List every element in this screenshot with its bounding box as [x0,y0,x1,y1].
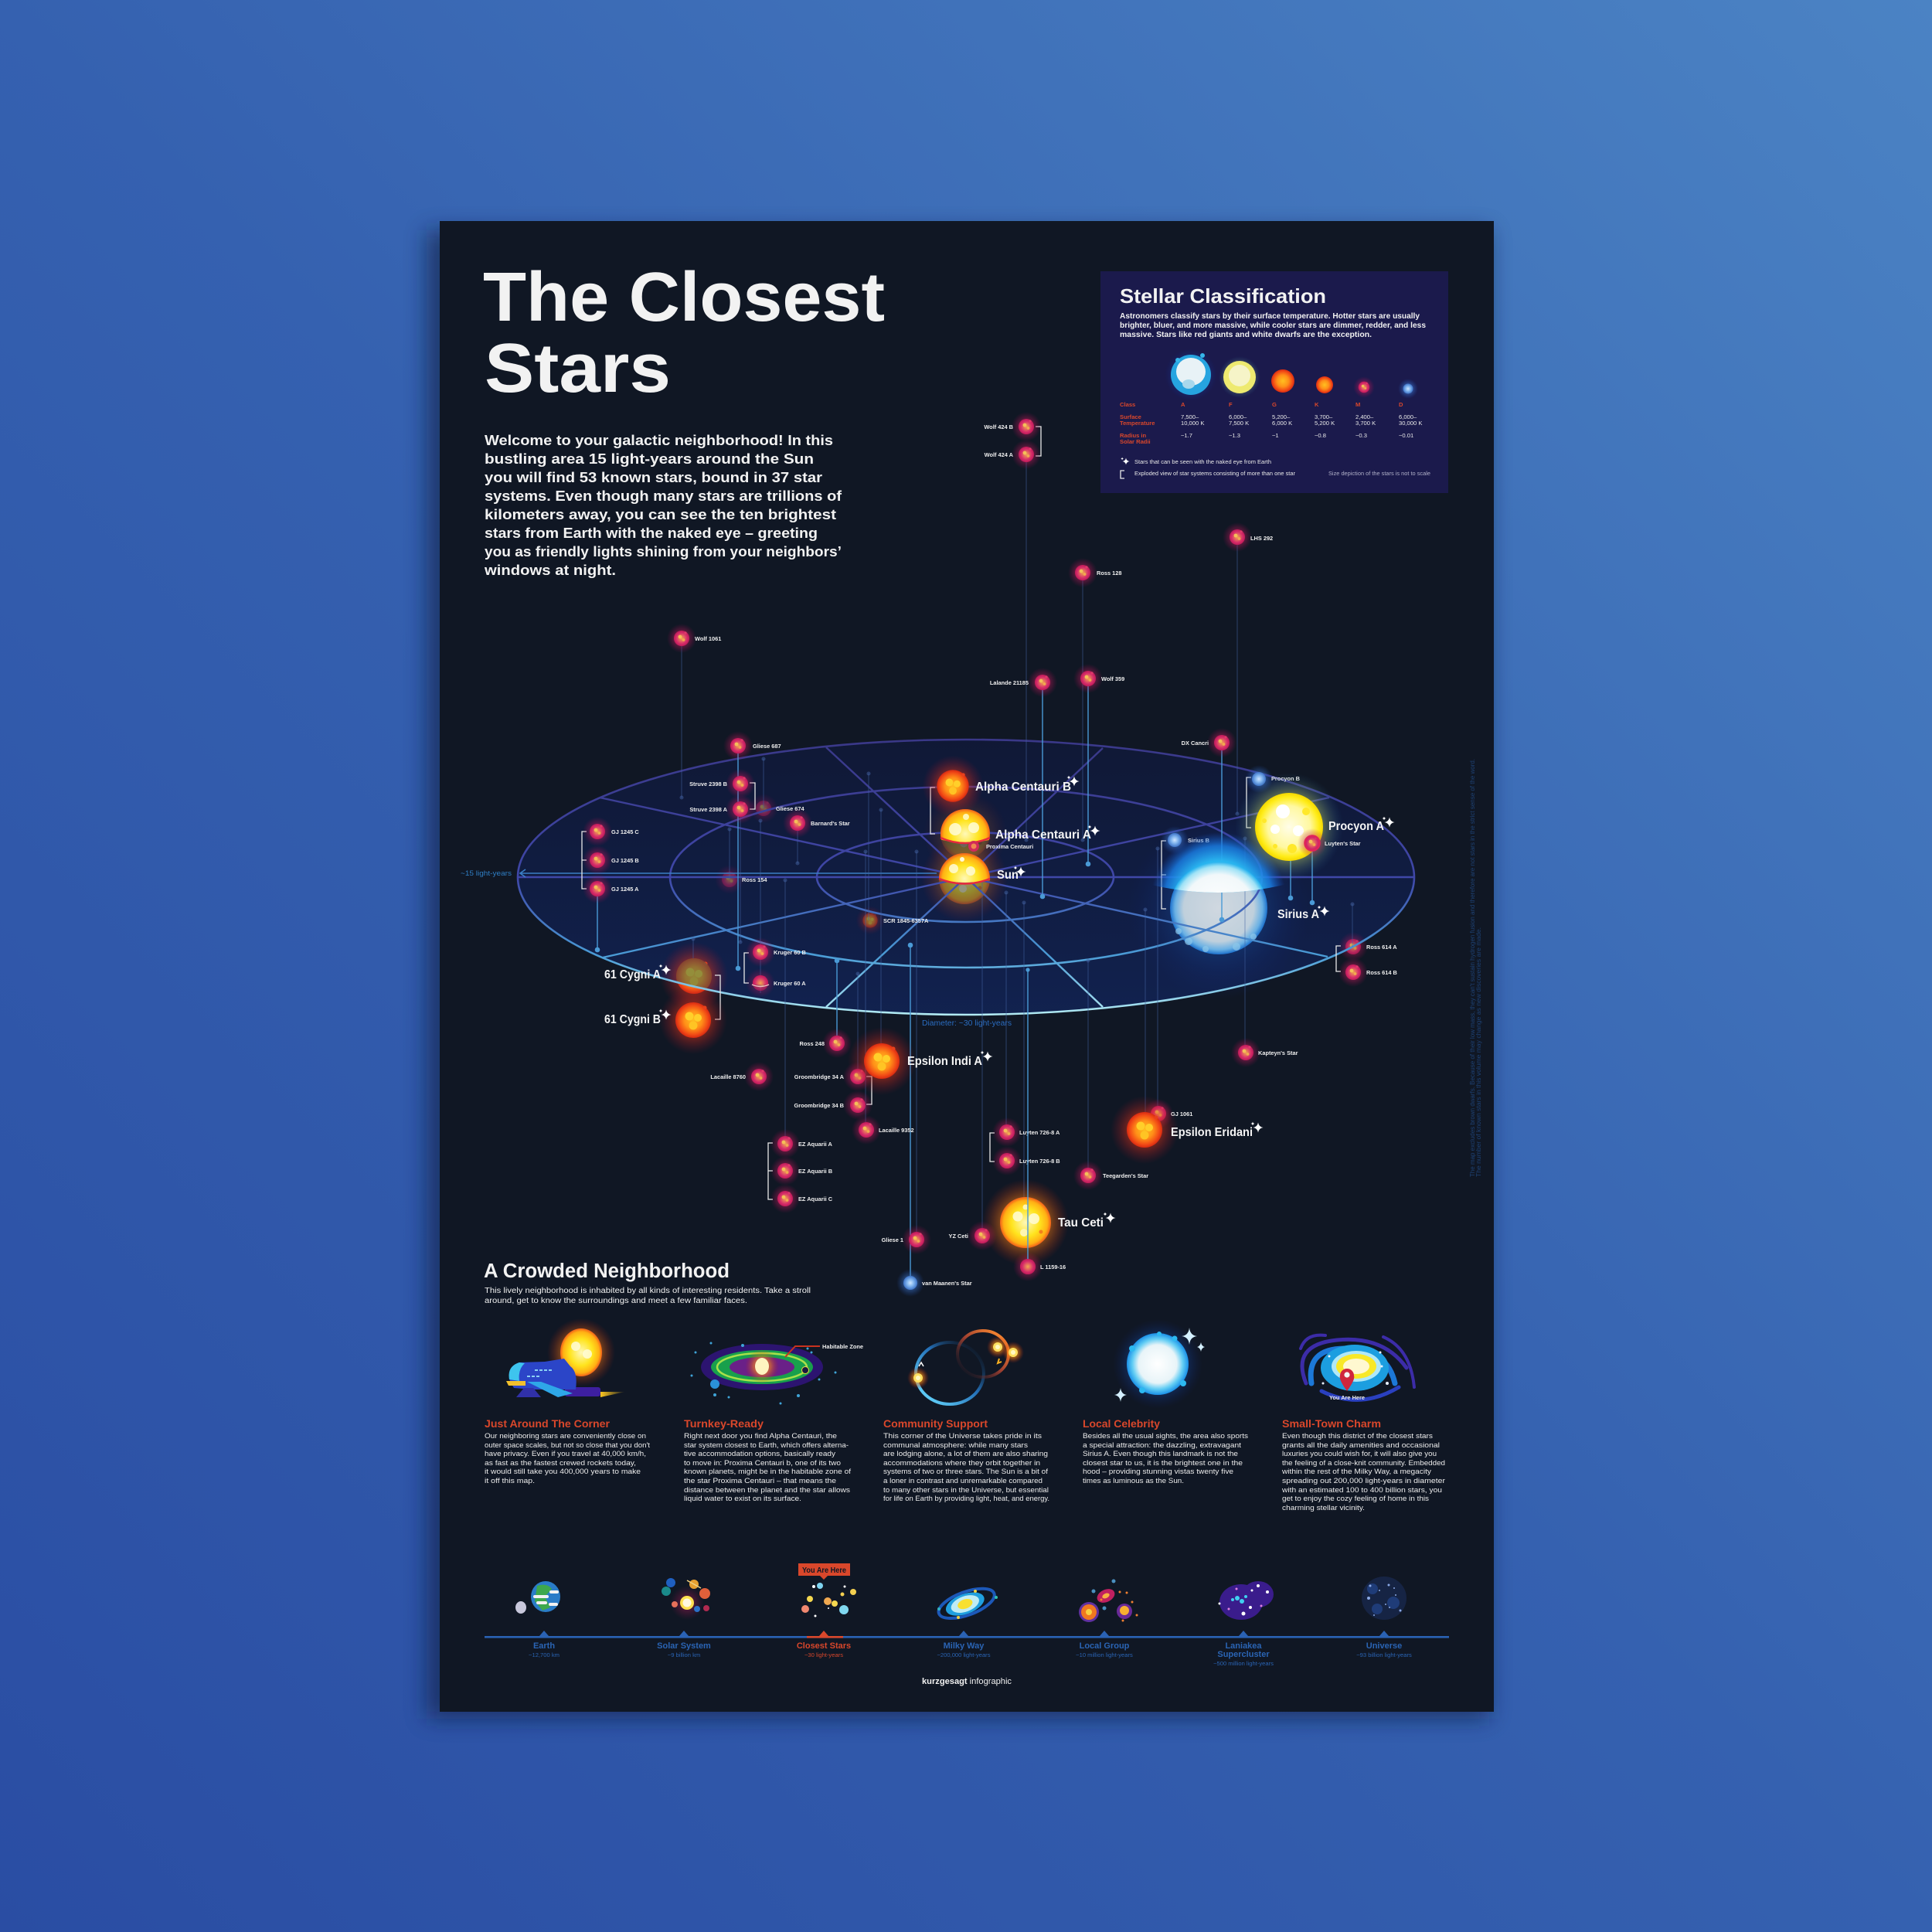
star: Luyten's Star [1298,828,1361,858]
star: EZ Aquarii C: EZ Aquarii C [798,1196,833,1202]
star: Struve 2398 B: Struve 2398 B [689,781,727,787]
star: Ross 614 A [1338,932,1368,961]
star: Kapteyn's Star [1231,1038,1298,1067]
star: SCR 1845-6357A dim [856,906,884,934]
column: Small-Town Charm [1281,1417,1445,1512]
side note: The number of known stars in this volume may change as new discoveries are made. [1475,927,1482,1177]
classification table: 3,700– [1315,413,1333,420]
icon: habitable zone [691,1342,863,1405]
star: Proxima Centauri [968,841,1033,852]
column: Local Celebrity: Local Celebrity [1083,1417,1160,1430]
star: DX Cancri [1182,728,1236,757]
star: GJ 1245 B [583,845,639,875]
scale: Universe [1356,1577,1412,1658]
side note [1469,759,1482,1177]
classification table: Solar Radii [1120,438,1151,445]
star: Epsilon Indi A: Epsilon Indi A [907,1055,982,1068]
classification table: 3,700 K [1355,420,1376,427]
star: Groombridge 34 B [794,1090,872,1120]
star: EZ Aquarii C [770,1184,833,1213]
scale: Laniakea Supercluster: Laniakea [1225,1641,1262,1651]
star: Ross 248 [800,1029,852,1058]
star: GJ 1245 B: GJ 1245 B [611,857,639,864]
star: Teegarden's Star: Teegarden's Star [1103,1172,1148,1179]
star: GJ 1245 A [583,874,639,903]
icon: galaxy with pin [1301,1335,1414,1401]
star: Ross 154 dim [715,865,744,894]
star: Alpha Centauri B [922,755,1079,817]
column: Small-Town Charm: the feeling of a close-knit community. Embedded [1282,1458,1445,1467]
label: Gliese 674: Gliese 674 [776,805,804,812]
column: Small-Town Charm: within the rest of the Milky Way, a megacity [1281,1467,1431,1475]
column: Local Celebrity: Sirius A. Even though this landmark is not the [1083,1449,1238,1458]
classification table: 5,200 K [1315,420,1335,427]
star: Kapteyn's Star: Kapteyn's Star [1258,1049,1298,1056]
scale: Closest Stars: You Are Here [802,1566,846,1575]
star: van Maanen's Star [896,1269,972,1297]
star: van Maanen's Star: van Maanen's Star [922,1280,972,1287]
legend: Size depiction of the stars is not to scale [1328,470,1430,477]
column: Local Celebrity: closest star to us, it is the brightest one in the [1083,1458,1243,1467]
classification table: 6,000 K [1272,420,1292,427]
star: Struve 2398 A [689,794,755,824]
star: Sun lower part [921,835,1008,922]
intro text: you will find 53 known stars, bound in 37 star [485,469,822,485]
poster shadow [427,230,1489,1719]
column: Small-Town Charm: with an estimated 100 to 400 billion stars, you [1281,1485,1442,1494]
icon: galaxy with pin: You Are Here [1329,1394,1365,1401]
legend: Stars that can be seen with the naked eye from Earth [1134,458,1271,465]
label: 61 Cygni A [604,964,671,981]
classification table: 6,000– [1229,413,1247,420]
scale: Milky Way: Milky Way [944,1641,985,1651]
star: Sirius A lower body [1170,862,1267,954]
classification table: Temperature [1120,420,1155,427]
column: Small-Town Charm: spreading out 200,000 light-years in diameter [1282,1476,1445,1485]
intro text: windows at night. [484,562,616,578]
star: Lalande 21185 [990,668,1057,697]
star: Epsilon Eridani [1111,1096,1263,1164]
label: Ross 614 A: Ross 614 A [1366,944,1397,951]
column: Turnkey-Ready [684,1417,851,1502]
star: Tau Ceti [982,1179,1116,1266]
column: Small-Town Charm: get to enjoy the cozy feeling of home in this [1282,1494,1429,1502]
column: Small-Town Charm: charming stellar vicinity. [1282,1503,1365,1512]
star: GJ 1245 C: GJ 1245 C [611,828,639,835]
classification table: 10,000 K [1181,420,1204,427]
star: Sirius B [1161,826,1209,854]
column: Just Around The Corner: it off this map. [485,1476,535,1485]
scale: Earth: ~12,700 km [529,1651,560,1658]
star: Lacaille 8760: Lacaille 8760 [710,1073,746,1080]
column: Community Support: accommodations where they orbit together in [883,1458,1040,1467]
star stems [595,456,1354,1283]
classification table: ~0.8 [1315,432,1326,439]
star: LHS 292 [1223,522,1273,552]
star: Kruger 60 B: Kruger 60 B [774,949,806,956]
icon: habitable zone: Habitable Zone [822,1343,863,1350]
radius label: ~15 light-years [461,869,512,878]
classification table: Radius in [1120,432,1147,439]
diameter label: Diameter: ~30 light-years [922,1019,1012,1028]
scale: Local Group: ~10 million light-years [1076,1651,1133,1658]
star: Tau Ceti: Tau Ceti [1058,1216,1104,1230]
stem: L 1159-16 over Tau Ceti [1026,968,1030,1267]
classification table: F [1229,401,1233,408]
classification table: ~1.3 [1229,432,1240,439]
intro text: kilometers away, you can see the ten brightest [485,506,836,522]
star: Wolf 424 B: Wolf 424 B [984,423,1013,430]
column: Small-Town Charm: grants all the daily amenities and occasional [1282,1440,1440,1449]
star: Luyten 726-8 B: Luyten 726-8 B [1019,1158,1060,1165]
star: Ross 128 [1068,558,1121,587]
star: EZ Aquarii A [770,1129,832,1158]
star: Sun [938,853,1026,885]
star: Wolf 424 A [985,440,1041,469]
Sirius glow behind the plane [1128,817,1310,999]
intro text [484,432,842,578]
scale: Laniakea Supercluster [1213,1581,1274,1667]
section heading: A Crowded Neighborhood [484,1260,811,1305]
column: Turnkey-Ready: the star Proxima Centauri – that means the [684,1476,836,1485]
scale: Earth: Earth [533,1641,555,1651]
classification table: ~0.3 [1355,432,1367,439]
star: Alpha Centauri A: Alpha Centauri A [995,828,1091,842]
column: Turnkey-Ready: Right next door you find Alpha Centauri, the [684,1431,837,1440]
title: The Closest [483,259,885,336]
star: Gliese 687 [723,731,781,760]
star: Groombridge 34 B: Groombridge 34 B [794,1102,844,1109]
galactic plane fill [518,740,1414,1015]
star: Lacaille 8760 [710,1062,774,1091]
column: Community Support: This corner of the Universe takes pride in its [883,1431,1042,1440]
column: Local Celebrity: times as luminous as the Sun. [1083,1476,1184,1485]
credit: kurzgesagt infographic [922,1677,1012,1686]
star: LHS 292: LHS 292 [1250,535,1273,542]
star: DX Cancri: DX Cancri [1182,740,1209,747]
star: YZ Ceti: YZ Ceti [949,1233,968,1240]
brackets for multi-star systems [582,427,1341,1199]
section heading: A Crowded Neighborhood: A Crowded Neighborhood [484,1260,730,1282]
star: Wolf 424 A: Wolf 424 A [985,451,1014,458]
star: GJ 1245 A: GJ 1245 A [611,886,639,893]
column: Community Support: systems of two or three stars. The Sun is a bit of [883,1467,1048,1475]
column: Community Support: communal atmosphere: while many stars [883,1440,1028,1449]
star: Ross 614 B [1338,957,1397,987]
column: Small-Town Charm: luxuries you could wish for, it will also give you [1282,1449,1437,1458]
star: 61 Cygni B [604,986,727,1054]
classification table: ~0.01 [1399,432,1413,439]
scale: Laniakea Supercluster: ~500 million light-years [1213,1660,1274,1667]
star: Barnard's Star: Barnard's Star [811,820,850,827]
panel description: brighter, bluer, and more massive, while cooler stars are dimmer, redder, and less [1120,321,1427,330]
star: Gliese 687: Gliese 687 [753,743,781,750]
star: GJ 1061 [1144,1099,1192,1128]
label: Ross 154: Ross 154 [742,876,767,883]
intro text: systems. Even though many stars are trillions of [485,488,842,504]
panel description: Astronomers classify stars by their surface temperature. Hotter stars are usually [1120,312,1420,321]
star: Ross 128: Ross 128 [1097,570,1121,577]
side note: The map excludes brown dwarfs. Because of their low mass, they can't sustain hydrogen fusion and therefore are not stars in the strict sense of the word. [1469,759,1476,1177]
scale: Closest Stars: Closest Stars [797,1641,851,1651]
star: Wolf 359 [1073,664,1124,693]
scale: Earth [515,1581,560,1658]
star: Alpha Centauri B: Alpha Centauri B [975,781,1071,794]
column: Community Support: for life on Earth by providing light, heat, and energy. [883,1494,1049,1502]
column: Turnkey-Ready: distance between the planet and the star allows [684,1485,850,1494]
column: Local Celebrity [1083,1417,1248,1485]
icon: orbiting stars [907,1331,1024,1404]
column: Turnkey-Ready: liquid water to exist on its surface. [684,1494,801,1502]
star: Wolf 424 B [984,412,1041,441]
column: Community Support: Community Support [883,1417,988,1430]
star: Sun: Sun [997,869,1019,882]
legend: Exploded view of star systems consisting of more than one star [1134,470,1295,477]
column: Small-Town Charm: Even though this district of the closest stars [1282,1431,1433,1440]
classification table [1120,401,1422,445]
star: Wolf 359: Wolf 359 [1101,675,1124,682]
radius arrow [520,869,937,877]
star: Barnard's Star [783,808,850,838]
classification table: A [1181,401,1185,408]
star: Sirius A upper dome [1154,833,1329,918]
star: Procyon A [1235,773,1394,881]
galactic plane rings and spokes [518,740,1414,1015]
column: Local Celebrity: hood – providing stunning vistas twenty five [1083,1467,1233,1475]
star: Teegarden's Star [1073,1161,1148,1190]
star: Gliese 1 [882,1225,931,1254]
section heading: A Crowded Neighborhood: This lively neighborhood is inhabited by all kinds of interesting residents. Take a stroll [485,1287,811,1295]
star: Kruger 60 A [747,970,805,997]
star: EZ Aquarii B: EZ Aquarii B [798,1168,832,1175]
classification table: D [1399,401,1403,408]
star: Lacaille 9352: Lacaille 9352 [879,1127,914,1134]
star: Sirius A upper dome: Sirius A [1277,908,1319,921]
star: Epsilon Eridani: Epsilon Eridani [1171,1126,1253,1139]
intro text: stars from Earth with the naked eye – greeting [485,525,818,541]
classification table: 7,500– [1181,413,1199,420]
star: Ross 614 B: Ross 614 B [1366,969,1397,976]
column: Turnkey-Ready: known planets, might be in the habitable zone of [684,1467,851,1475]
column: Just Around The Corner: it would still take you 400,000 years to make [485,1467,641,1475]
panel description: massive. Stars like red giants and white dwarfs are the exception. [1120,331,1372,339]
classification table: K [1315,401,1319,408]
column: Just Around The Corner: as fast as the fastest crewed rockets today, [485,1458,636,1467]
scale: Solar System: ~9 billion km [668,1651,700,1658]
star: Luyten 726-8 B [992,1146,1060,1175]
scale: Milky Way [935,1583,998,1658]
column: Just Around The Corner [485,1417,650,1485]
classification table: Surface [1120,413,1141,420]
star: Alpha Centauri A [940,809,1100,844]
star: Luyten 726-8 A: Luyten 726-8 A [1019,1129,1060,1136]
star: Wolf 1061 [667,624,721,653]
star: L 1159-16: L 1159-16 [1040,1264,1066,1270]
scale: Local Group: Local Group [1080,1641,1130,1651]
classification table: 30,000 K [1399,420,1422,427]
column: Local Celebrity: Besides all the usual sights, the area also sports [1083,1431,1248,1440]
star: Struve 2398 B [689,769,755,798]
scale: Universe: ~93 billion light-years [1356,1651,1412,1658]
star: Lacaille 9352 [852,1115,914,1145]
classification table: 6,000– [1399,413,1417,420]
panel description [1120,312,1427,339]
star: GJ 1061: GJ 1061 [1171,1111,1192,1117]
column: Turnkey-Ready: star system closest to Earth, which offers alterna- [684,1440,849,1449]
star: Luyten's Star: Luyten's Star [1325,840,1361,847]
classification table: G [1272,401,1277,408]
star: Procyon B [1245,765,1300,793]
star: Kruger 60 A: Kruger 60 A [774,980,806,987]
column: Just Around The Corner: outer space scales, but not so close that you don't [485,1440,650,1449]
scale: Local Group [1076,1580,1138,1658]
column: Turnkey-Ready: Turnkey-Ready [684,1417,764,1430]
classification table: ~1 [1272,432,1279,439]
star: 61 Cygni B: 61 Cygni B [604,1013,661,1026]
column: Turnkey-Ready: tive accommodation options, basically ready [684,1449,835,1458]
star: Groombridge 34 A [794,1062,872,1091]
star: Proxima Centauri: Proxima Centauri [986,843,1033,850]
panel: stellar classification [1100,271,1448,493]
star: Ross 248: Ross 248 [800,1040,825,1047]
column: Small-Town Charm: Small-Town Charm [1282,1417,1381,1430]
star: Epsilon Indi A [848,1027,992,1095]
classification table: 5,200– [1272,413,1291,420]
star: L 1159-16 core [1020,1259,1036,1274]
star: EZ Aquarii A: EZ Aquarii A [798,1141,832,1148]
column: Community Support: are lodging alone, a lot of them are also sharing [883,1449,1048,1458]
scale: Closest Stars [797,1563,856,1658]
column: Community Support [883,1417,1049,1502]
scale: Universe: Universe [1366,1641,1402,1651]
icon: Sirius [1113,1319,1205,1409]
column: Local Celebrity: a special attraction: the dazzling, extravagant [1083,1440,1241,1449]
icon: rocket and star [506,1318,625,1397]
star: Kruger 60 B [746,937,806,967]
title: Stars [485,330,671,407]
classification table: M [1355,401,1360,408]
star: 61 Cygni A [662,944,726,1005]
scale: Milky Way: ~200,000 light-years [937,1651,991,1658]
intro text: you as friendly lights shining from your neighbors’ [485,543,842,560]
label: SCR 1845-6357A: SCR 1845-6357A [883,917,929,924]
star: Lalande 21185: Lalande 21185 [990,679,1029,686]
class stars row [1165,349,1418,401]
section heading: A Crowded Neighborhood: around, get to know the surroundings and meet a few familiar faces. [485,1297,747,1305]
column: Just Around The Corner: Just Around The Corner [485,1417,611,1430]
scale: Closest Stars: ~30 light-years [804,1651,843,1658]
star: Procyon B: Procyon B [1271,775,1300,782]
column: Just Around The Corner: have privacy. Even if you travel at 40,000 km/h, [485,1449,646,1458]
star: L 1159-16 [1013,1252,1066,1281]
star: Gliese 674 dim [749,794,778,823]
column: Community Support: a loner in contrast and unremarkable compared [883,1476,1043,1485]
classification table: 7,500 K [1229,420,1249,427]
star: Procyon A: Procyon A [1328,820,1384,833]
intro text: Welcome to your galactic neighborhood! In this [485,432,833,448]
scale timeline axis [485,1631,1449,1638]
star: Gliese 1: Gliese 1 [882,1236,903,1243]
scale: Solar System [657,1578,711,1658]
column: Just Around The Corner: Our neighboring stars are conveniently close on [485,1431,646,1440]
scale: Solar System: Solar System [657,1641,711,1651]
label: 61 Cygni A: 61 Cygni A [604,968,661,981]
star: YZ Ceti [949,1221,997,1250]
panel heading: Stellar Classification [1120,284,1326,308]
title [483,259,885,407]
star: EZ Aquarii B [770,1156,832,1185]
star: Alpha Centauri A lower part [923,792,1007,876]
star: GJ 1245 C [583,817,639,846]
column: Community Support: to many other stars in the Universe, but essential [883,1485,1049,1494]
star: Sirius B: Sirius B [1188,837,1209,844]
star: Groombridge 34 A: Groombridge 34 A [794,1073,845,1080]
scale: Laniakea Supercluster: Supercluster [1217,1650,1270,1659]
poster [440,221,1494,1712]
star: Luyten 726-8 A [992,1117,1060,1147]
legend [1121,457,1430,478]
classification table: ~1.7 [1181,432,1192,439]
classification table: Class [1120,401,1135,408]
star: Struve 2398 A: Struve 2398 A [689,806,728,813]
stars behind the plane [660,792,1368,1010]
classification table: 2,400– [1355,413,1374,420]
intro text: bustling area 15 light-years around the Sun [485,451,814,467]
column: Turnkey-Ready: to move in: Proxima Centauri b, one of its two [684,1458,841,1467]
star: Wolf 1061: Wolf 1061 [695,635,721,642]
